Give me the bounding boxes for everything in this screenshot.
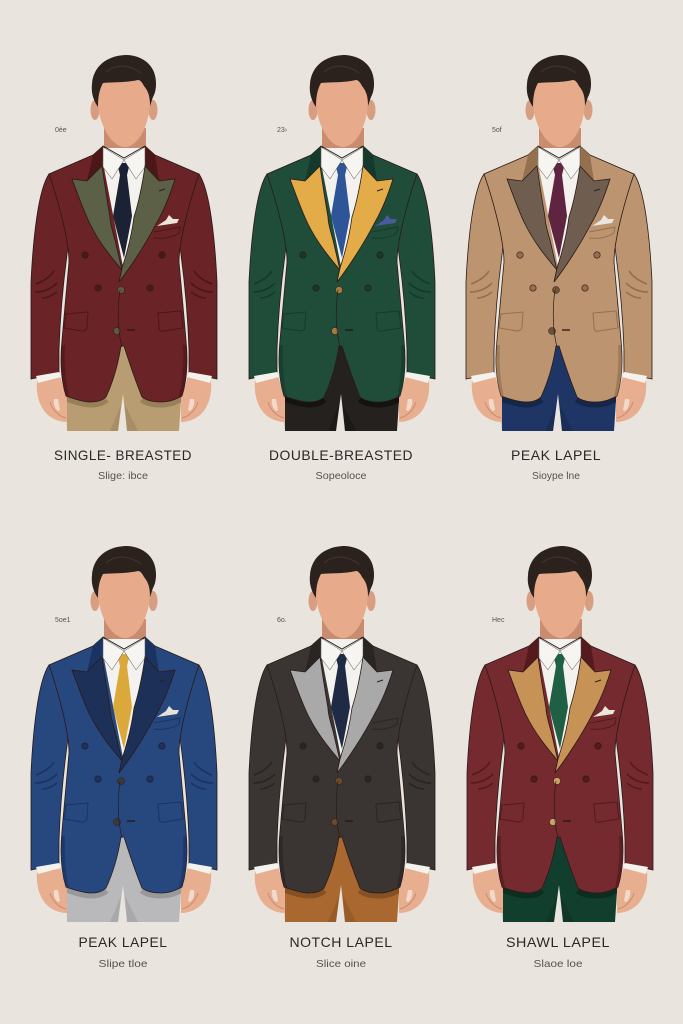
heading: peak lapel: PEAK LAPEL xyxy=(78,934,168,950)
small tag: 6o. xyxy=(277,617,287,624)
figure: man in burgundy jacket with tan lapels xyxy=(467,546,653,922)
caption: Slice oine xyxy=(316,958,366,970)
small tag: 5of xyxy=(492,127,502,134)
panel: single-breasted jacket xyxy=(31,55,217,482)
panel: double-breasted jacket xyxy=(249,55,435,482)
figure: man in blue jacket with navy lapels xyxy=(31,546,217,922)
caption: Slige: ibce xyxy=(98,470,148,482)
panel: shawl lapel xyxy=(467,546,653,970)
figure: man in green jacket with gold lapels xyxy=(249,55,435,431)
heading: notch lapel: NOTCH LAPEL xyxy=(290,934,392,950)
small tag: 0èe xyxy=(55,127,67,134)
heading: double-breasted: DOUBLE-BREASTED xyxy=(269,447,413,463)
caption: Sopeoloce xyxy=(316,470,367,482)
panel: peak lapel blue jacket xyxy=(31,546,217,970)
panel: notch lapel xyxy=(249,546,435,970)
heading: single-breasted: SINGLE- BREASTED xyxy=(54,447,192,463)
small tag: 5oe1 xyxy=(55,617,71,624)
small tag: Hec xyxy=(492,617,505,624)
figure: man in maroon jacket with olive lapels xyxy=(31,55,217,431)
heading: shawl lapel: SHAWL LAPEL xyxy=(506,934,610,950)
figure: man in charcoal jacket with grey lapels xyxy=(249,546,435,922)
caption: Slaoe loe xyxy=(534,958,583,970)
small tag: 23› xyxy=(277,127,288,134)
caption: Slipe tloe xyxy=(98,958,148,970)
panel: peak lapel tan jacket xyxy=(466,55,652,482)
figure: man in tan jacket with taupe lapels xyxy=(466,55,652,431)
caption: Sioype lne xyxy=(532,470,580,482)
heading: peak lapel: PEAK LAPEL xyxy=(511,447,601,463)
